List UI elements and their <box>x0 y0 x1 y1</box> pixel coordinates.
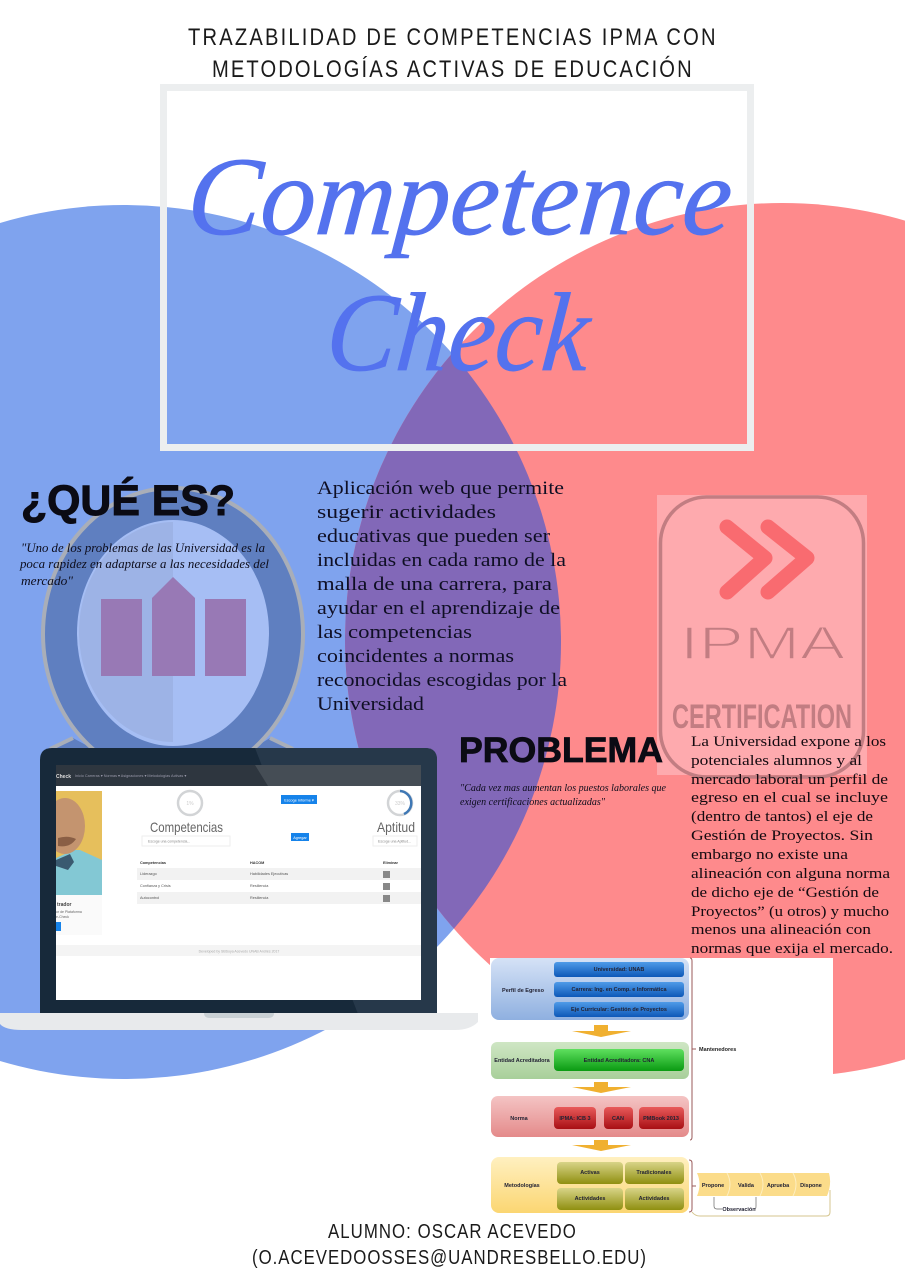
title: TRAZABILIDAD DE COMPETENCIAS IPMA CON <box>188 23 716 50</box>
arrow: perfil to entidad <box>572 1025 631 1037</box>
app screenshot: Liderazgo <box>140 872 157 876</box>
background: blue circle <box>0 205 561 1079</box>
text block: problem description: normas que exija el mercado. <box>691 941 893 957</box>
app screenshot: Developed by SBSoya Acevedo UNAB Andrés 2017 <box>199 950 279 954</box>
heading: ¿Qué es?: ¿QUÉ ES? <box>21 477 235 525</box>
icon: IPMA certification badge: IPMA <box>680 617 845 669</box>
bracket: mantenedores: Mantenedores <box>699 1047 736 1053</box>
diagram: norma: IPMA: ICB 3 <box>559 1116 591 1122</box>
app screenshot: Resiliencia <box>250 884 269 888</box>
quote: problema: exigen certificaciones actualizadas" <box>460 796 605 808</box>
app screenshot: Resiliencia <box>250 896 269 900</box>
diagram: metodologías: Activas <box>580 1170 600 1176</box>
app screenshot: HACOM <box>250 861 264 865</box>
diagram: entidad acreditadora <box>491 1042 689 1079</box>
app screenshot: Confianza y Crisis <box>140 884 171 888</box>
heading: Competence Check: Competence <box>183 135 738 259</box>
quote: problema <box>460 782 666 808</box>
diagram: perfil de egreso <box>491 958 689 1020</box>
text block: problem description: menos una alineación con <box>691 922 872 938</box>
app screenshot: Aptitud <box>377 819 415 835</box>
text block: problem description: La Universidad expone a los <box>691 734 886 750</box>
app screenshot: Check <box>56 774 71 780</box>
diagram: white background <box>490 958 833 1220</box>
heading: Competence Check <box>183 135 738 395</box>
text block: problem description: Proyectos” (u otros) y mucho <box>691 904 889 920</box>
diagram: metodologías: Actividades <box>639 1196 669 1202</box>
heading: problema: PROBLEMA <box>459 731 663 770</box>
profile photo <box>56 791 102 895</box>
app screenshot: Escoge Informe ▾ <box>284 798 314 802</box>
text block: description: Aplicación web que permite <box>317 478 564 499</box>
app screenshot: 1% <box>186 801 194 807</box>
app screenshot <box>45 765 421 956</box>
text block: problem description: mercado laboral un perfil de <box>691 772 888 788</box>
text block: problem description: Gestión de Proyectos. Sin <box>691 828 874 844</box>
diagram: perfil de egreso: Carrera: Ing. en Comp. e Informática <box>571 987 667 993</box>
diagram: norma: Norma <box>510 1116 529 1122</box>
bracket and process flow: Observación <box>722 1207 756 1213</box>
text block: description: ayudar en el aprendizaje de <box>317 598 560 619</box>
diagram: norma: CAN <box>612 1116 624 1122</box>
app screenshot: e-Check <box>56 915 69 919</box>
quote: qué es: poca rapidez en adaptarse a las necesidades del <box>19 557 270 571</box>
diagram: entidad acreditadora: Entidad Acreditadora: CNA <box>584 1058 654 1064</box>
background: red circle <box>345 203 905 1077</box>
title: METODOLOGÍAS ACTIVAS DE EDUCACIÓN <box>212 55 692 82</box>
diagram: perfil de egreso: Eje Curricular: Gestión de Proyectos <box>571 1007 667 1013</box>
app screenshot: trador <box>57 902 72 908</box>
text block: description: reconocidas escogidas por la <box>317 670 568 691</box>
icon: faded university badge <box>43 488 303 780</box>
app screenshot: Autocontrol <box>140 896 159 900</box>
text block: problem description <box>691 734 893 957</box>
diagram: metodologías: Metodologías <box>504 1183 540 1189</box>
bracket and process flow: Dispone <box>800 1183 822 1189</box>
text block: problem description: embargo no existe una <box>691 847 848 863</box>
diagram: entidad acreditadora: Entidad Acreditadora <box>494 1058 551 1064</box>
background: purple overlap <box>345 355 561 928</box>
text block: problem description: potenciales alumnos y al <box>691 753 862 769</box>
text block: description: sugerir actividades <box>317 502 496 523</box>
text block: description: malla de una carrera, para <box>317 574 553 595</box>
arrow: norma to metodologías <box>572 1140 631 1151</box>
bracket and process flow <box>689 1160 830 1216</box>
title frame <box>164 88 750 448</box>
title <box>188 23 716 82</box>
app screenshot: Agregar <box>293 836 307 840</box>
text block: problem description: alineación con alguna norma <box>691 866 890 882</box>
app screenshot: Escoge una competencia... <box>148 840 190 844</box>
app screenshot: or de Plataforma <box>56 910 82 914</box>
footer: student credit: ALUMNO: OSCAR ACEVEDO <box>328 1220 576 1242</box>
bracket: mantenedores <box>690 958 736 1140</box>
diagram: metodologías: Tradicionales <box>636 1170 672 1176</box>
app screenshot: Eliminar <box>383 861 399 865</box>
text block: problem description: (dentro de tantos) el eje de <box>691 809 873 825</box>
diagram: metodologías: Actividades <box>575 1196 605 1202</box>
quote: qué es: mercado" <box>21 574 74 588</box>
app screenshot: Inicio Carreras ▾ Normas ▾ Asignaciones ▾ Metodologías Activas ▾ <box>75 774 186 778</box>
app screenshot: Competencias <box>150 819 223 835</box>
diagram: norma: PMBook 2013 <box>643 1116 679 1122</box>
diagram: perfil de egreso: Perfil de Egreso <box>502 988 545 994</box>
text block: description: coincidentes a normas <box>317 646 514 667</box>
laptop mockup <box>0 748 478 1030</box>
diagram: norma <box>491 1096 689 1137</box>
diagram: metodologías <box>491 1157 689 1213</box>
icon: IPMA certification badge <box>657 495 867 777</box>
arrow: entidad to norma <box>572 1082 631 1093</box>
quote: problema: "Cada vez mas aumentan los puestos laborales que <box>460 782 666 794</box>
text block: problem description: de dicho eje de “Gestión de <box>691 885 879 901</box>
text block: description: incluidas en cada ramo de la <box>317 550 567 571</box>
bracket and process flow: Propone <box>702 1183 724 1189</box>
heading: Competence Check: Check <box>322 271 597 395</box>
app screenshot: Escoge una Aptitud... <box>378 840 411 844</box>
diagram: perfil de egreso: Universidad: UNAB <box>594 967 644 973</box>
bracket and process flow: Aprueba <box>767 1183 790 1189</box>
text block: problem description: egreso en el cual se incluye <box>691 790 888 806</box>
bracket and process flow: Valida <box>738 1183 755 1189</box>
text block: description <box>317 478 568 715</box>
quote: qué es <box>19 541 270 588</box>
footer: student credit: (O.ACEVEDOOSSES@UANDRESBELLO.EDU) <box>252 1246 646 1268</box>
quote: qué es: "Uno de los problemas de las Universidad es la <box>21 541 265 555</box>
text block: description: las competencias <box>317 622 472 643</box>
app screenshot: 33% <box>395 801 406 807</box>
app screenshot: Habilidades Ejecutivas <box>250 872 288 876</box>
text block: description: Universidad <box>317 694 425 715</box>
text block: description: educativas que pueden ser <box>317 526 551 547</box>
footer: student credit <box>252 1220 646 1268</box>
app screenshot: Competencias <box>140 861 166 865</box>
